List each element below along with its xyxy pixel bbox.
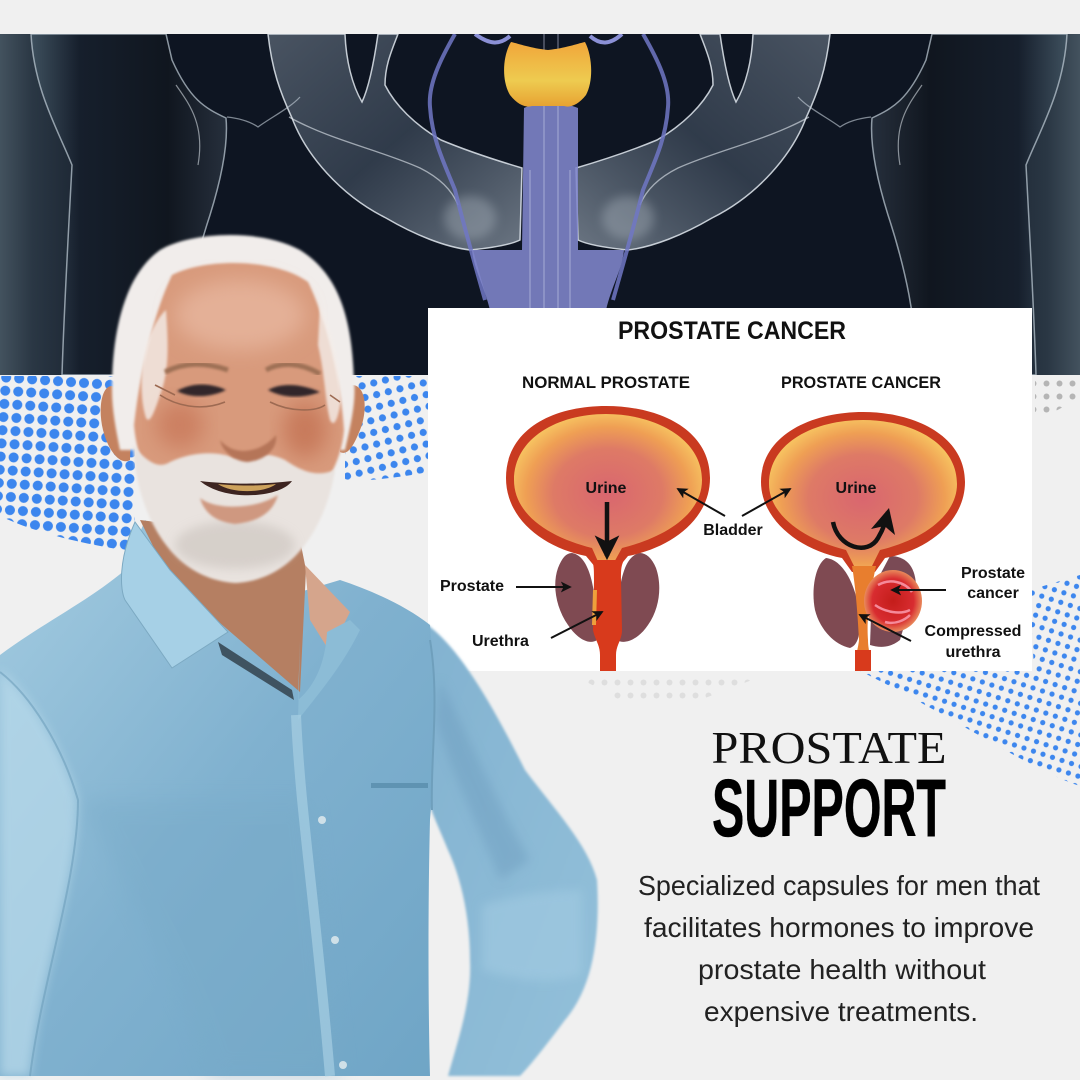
compressed urethra (852, 566, 876, 671)
faint dots under diagram (570, 673, 770, 700)
arrow: urine flow (605, 502, 609, 556)
normal prostate illustration (440, 406, 710, 671)
description text: facilitates hormones to improve (644, 912, 1034, 943)
torso shading (80, 800, 340, 1076)
subtitle: normal prostate: NORMAL PROSTATE (522, 373, 690, 392)
prostate gland (504, 42, 591, 107)
prostate lobes (555, 553, 597, 642)
urethra (592, 560, 624, 671)
hair (112, 235, 355, 450)
prostate diagram panel (428, 308, 1032, 671)
arrow: prostate (516, 586, 570, 588)
collar inner dark band (218, 642, 294, 700)
heading line: prostate: PROSTATE (712, 722, 946, 773)
label: prostate cancer: Prostate (961, 565, 1025, 582)
button placket (296, 715, 330, 1076)
description text: Specialized capsules for men that (638, 870, 1040, 901)
tumor (864, 570, 922, 632)
bladder (506, 406, 710, 568)
beard shading (175, 521, 295, 569)
eye wrinkles (155, 385, 340, 410)
arrow: urethra (551, 612, 602, 638)
shirt pocket (371, 783, 428, 788)
sleeve seam (0, 672, 78, 1076)
right collar (298, 620, 360, 720)
cancerous prostate illustration: cancer (967, 585, 1019, 602)
subtitle: prostate cancer: PROSTATE CANCER (781, 373, 941, 392)
arrow: prostate cancer (892, 589, 946, 591)
label: urine: Urine (836, 480, 877, 497)
description text: expensive treatments. (704, 996, 978, 1027)
cancerous prostate illustration (761, 412, 1025, 671)
arrow: compressed urethra (860, 615, 911, 641)
description text: prostate health without (698, 954, 986, 985)
ears (101, 386, 132, 461)
label: bladder: Bladder (703, 522, 763, 539)
diagram title: PROSTATE CANCER (618, 317, 846, 345)
neck opening shirt band (305, 565, 350, 652)
bladder (761, 412, 965, 572)
description text (638, 870, 1040, 1027)
shirt torso (0, 520, 434, 1076)
cheeks (156, 401, 204, 449)
shirt cuff highlight (482, 890, 582, 980)
label: prostate: Prostate (440, 578, 504, 595)
label: compressed urethra: Compressed (925, 623, 1021, 640)
eyes (177, 384, 320, 397)
product heading (712, 722, 946, 854)
man portrait (0, 235, 598, 1076)
shirt buttons (318, 816, 347, 1069)
urethra and penile structure (430, 34, 668, 310)
grey halftone dots, top right (1035, 378, 1080, 414)
arrow: backflow (833, 512, 888, 548)
blue halftone dots, left (0, 376, 135, 552)
arm fold shading (436, 680, 530, 880)
sleeve fold (430, 640, 435, 810)
blue halftone band, lower right (860, 575, 1080, 786)
eyebrows (165, 364, 320, 374)
label: urine: Urine (586, 480, 627, 497)
beard (133, 445, 335, 583)
nose (220, 435, 276, 462)
prostate lobes (813, 558, 860, 648)
left half of pelvis (31, 34, 522, 375)
forehead highlight (175, 280, 305, 350)
temple hair streaks (142, 305, 341, 423)
cancerous prostate illustration: urethra (945, 644, 1001, 661)
arrow: bladder right (742, 489, 790, 516)
left sleeve shading (0, 670, 78, 1076)
blue halftone dots, upper right of head (345, 376, 428, 482)
right arm, hand on hip (420, 620, 598, 1076)
label: urethra: Urethra (472, 633, 529, 650)
arrow: bladder left (678, 489, 725, 516)
right half of pelvis, mirrored (576, 34, 1067, 375)
x-ray pelvis panel (0, 34, 1080, 375)
mouth (200, 481, 292, 495)
left collar (121, 522, 228, 668)
face (134, 263, 344, 535)
neck (140, 520, 306, 692)
chin skin (200, 495, 278, 524)
